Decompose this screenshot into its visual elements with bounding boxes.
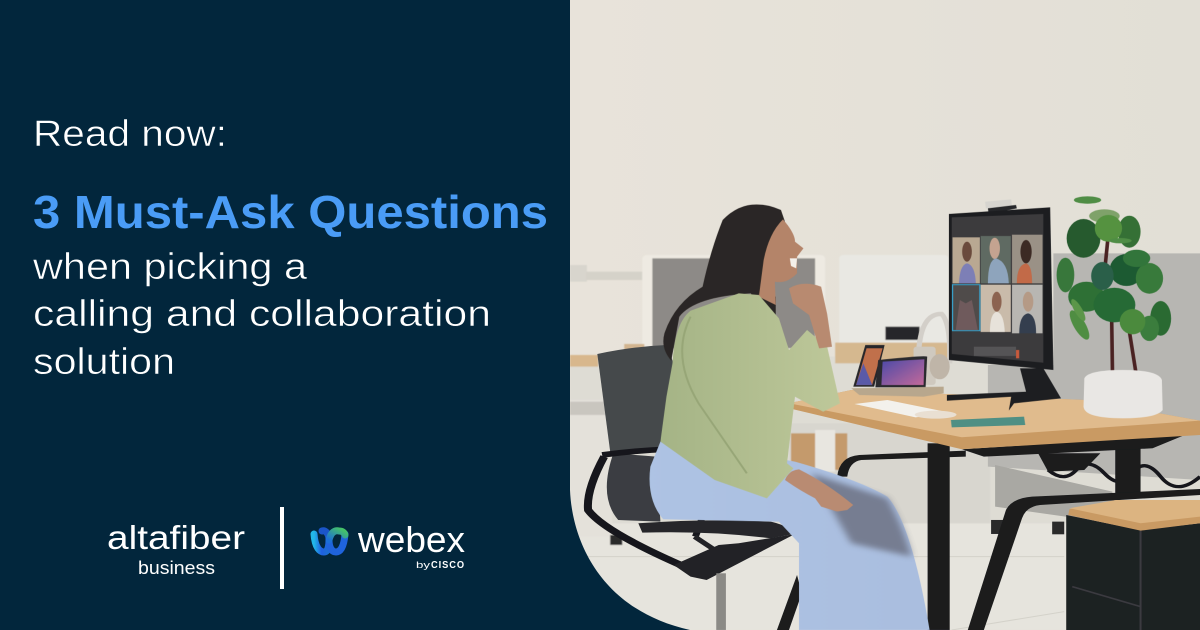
eyebrow: read now: Read now: <box>33 113 227 154</box>
grey felt partition <box>988 253 1200 480</box>
office wall background <box>570 0 1200 630</box>
logo: webex icon <box>314 531 345 552</box>
headline: 3 Must-Ask Questions <box>33 186 548 238</box>
logo: webex by cisco: webex <box>357 519 465 560</box>
photo: woman on a video call at her desk <box>570 0 1200 630</box>
white pot <box>1084 370 1163 418</box>
logo: altafiber business: altafiber <box>107 519 245 556</box>
woman <box>650 204 930 630</box>
shirt <box>660 293 840 498</box>
logo: webex by cisco: CISCO <box>431 560 465 571</box>
potted plant <box>1057 196 1171 418</box>
leaves <box>1057 196 1171 342</box>
cable tray and cables <box>991 464 1200 534</box>
desk devices: phone, dock, headset <box>851 314 950 397</box>
subheading: solution <box>33 341 175 382</box>
keyboard, mouse and notebook <box>854 400 1025 427</box>
hair <box>663 204 785 361</box>
subheading: calling and collaboration <box>33 293 491 334</box>
background office furniture <box>570 255 1200 630</box>
raised hand and forearm <box>789 284 832 348</box>
subheading: when picking a <box>32 246 307 287</box>
knee shading <box>811 473 912 557</box>
logo: webex by cisco: by <box>416 560 431 570</box>
monitor with video call <box>947 199 1061 411</box>
dark navy text panel with curved corner <box>0 0 690 630</box>
monitor body <box>949 207 1053 370</box>
desk frame <box>777 435 1200 630</box>
hand on knee <box>785 469 853 512</box>
trousers <box>650 442 930 630</box>
video tiles <box>953 235 1043 358</box>
logo divider <box>280 507 284 589</box>
stems <box>1104 233 1136 372</box>
floor seams <box>586 557 1064 630</box>
monitor stand <box>947 368 1061 411</box>
filing cabinet <box>1066 500 1200 630</box>
chair <box>588 345 795 630</box>
desk top <box>789 390 1200 449</box>
subheading <box>32 246 491 382</box>
logo: altafiber business <box>107 519 245 578</box>
logo: altafiber business: business <box>138 558 215 578</box>
face and neck <box>759 219 803 305</box>
webcam <box>985 199 1017 214</box>
